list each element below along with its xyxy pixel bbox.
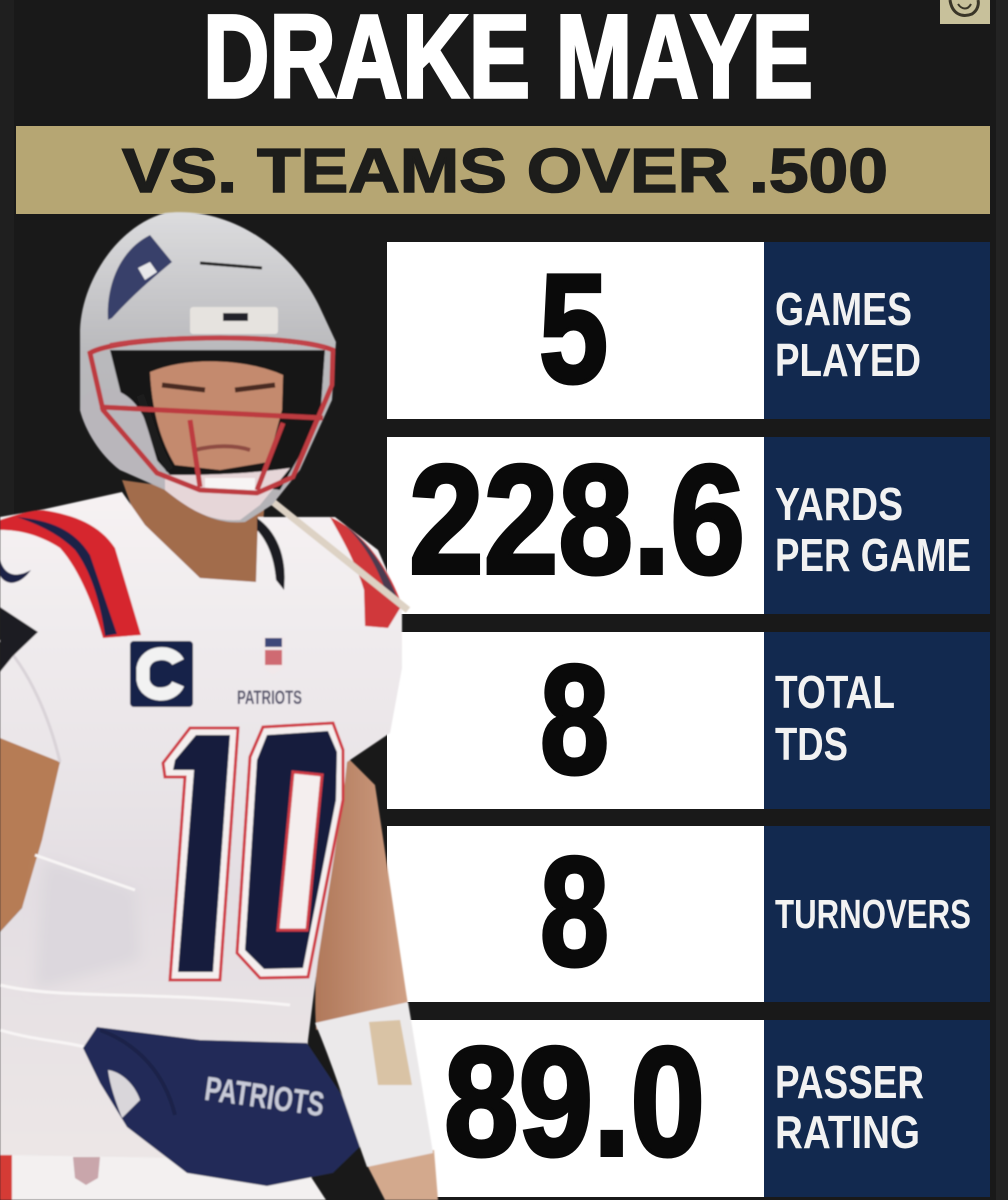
nfl shield [262, 637, 285, 675]
stat row: total tds: TOTAL [775, 666, 895, 718]
fanny pouch [83, 1027, 370, 1186]
stat row: total tds: TDS [775, 718, 848, 770]
jersey number 10 [163, 723, 343, 980]
neck [122, 480, 265, 585]
pouch wordmark: PATRIOTS [202, 1070, 326, 1124]
left arm [0, 736, 60, 932]
helmet logo [108, 235, 172, 320]
stat row: total tds: 8 [540, 633, 609, 806]
swoosh [0, 560, 31, 583]
face mask [90, 338, 333, 493]
left shoulder stripes [0, 510, 141, 638]
stat row: games played: 5 [539, 242, 608, 415]
face opening [110, 350, 325, 490]
wrist tape [315, 1002, 433, 1167]
helmet bumper [190, 307, 278, 334]
chest wordmark: PATRIOTS [237, 688, 302, 709]
hand [367, 1150, 438, 1200]
stat row: passer rating: RATING [775, 1106, 920, 1158]
chin strap [268, 498, 408, 610]
captain patch [130, 641, 193, 707]
right shoulder stripes [330, 517, 402, 628]
stat row: passer rating: 89.0 [444, 1015, 705, 1188]
face [150, 361, 283, 470]
collar stripe [257, 518, 285, 590]
stat row: games played: GAMES [775, 283, 912, 335]
stat row: total tds [387, 632, 990, 809]
lower helmet left cheek [80, 388, 170, 490]
stat row: turnovers: 8 [540, 825, 609, 998]
right arm [315, 755, 408, 1030]
stat row: yards per game [387, 433, 990, 614]
subtitle band: VS. TEAMS OVER .500 [122, 137, 888, 206]
helmet [80, 212, 336, 522]
sleeve patch [0, 607, 38, 672]
pants nfl shield [73, 1157, 100, 1185]
stat row: passer rating [387, 1015, 990, 1197]
stat row: yards per game: 228.6 [409, 433, 745, 606]
player [0, 212, 438, 1200]
stat row: passer rating: PASSER [775, 1056, 924, 1108]
jersey [0, 492, 402, 1160]
sleeve crease [0, 640, 60, 762]
chin guard [165, 468, 290, 520]
stat row: yards per game: YARDS [775, 478, 903, 530]
stat row: turnovers [387, 825, 990, 1002]
subtitle band [16, 126, 990, 214]
stat row: games played [387, 242, 990, 419]
helmet top vent [200, 263, 262, 268]
stat row: games played: PLAYED [775, 334, 921, 386]
pants [0, 1155, 326, 1200]
jersey fold shading [35, 860, 140, 990]
corner logo [940, 0, 990, 24]
